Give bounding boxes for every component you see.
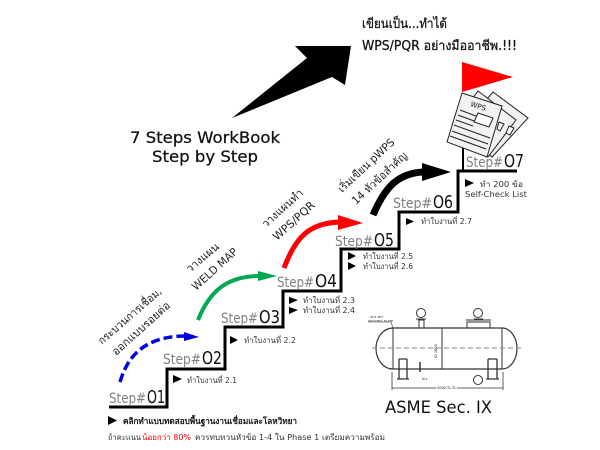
heading: goal: เขียนเป็น...ทำได้ — [362, 14, 447, 32]
step labels: Step# — [277, 275, 314, 291]
arrow: large black growth arrow — [232, 46, 351, 118]
title — [130, 128, 281, 166]
step labels: O6 — [433, 192, 453, 213]
footer instruction: ถ้าคะแนน — [108, 433, 141, 442]
vessel caption: ASME Sec. IX — [385, 398, 492, 417]
rotated captions: 14 หัวข้อสำคัญ — [349, 149, 410, 207]
step labels: O2 — [202, 348, 222, 369]
icon: red flag — [462, 62, 513, 92]
title: 7 Steps WorkBook — [130, 128, 281, 147]
step labels: Step# — [109, 391, 146, 407]
pressure vessel drawing: ID 1800 — [434, 344, 438, 358]
worksheet notes — [173, 179, 527, 385]
worksheet notes: ทำใบงานที่ 2.6 — [363, 260, 413, 271]
icon: WPS documents — [447, 91, 528, 157]
heading: goal: WPS/PQR อย่างมืออาชีพ.!!! — [362, 38, 517, 54]
heading: goal — [362, 14, 517, 54]
rotated captions: วางแผนทำ — [259, 186, 306, 230]
title: Step by Step — [152, 147, 258, 166]
worksheet notes: ทำ 200 ข้อ — [480, 180, 523, 189]
step labels: Step# — [466, 155, 503, 171]
footer instruction: น้อยกว่า 80% — [142, 433, 191, 442]
rotated captions: WPS/PQR — [270, 199, 318, 243]
worksheet notes: ทำใบงานที่ 2.4 — [303, 304, 355, 315]
step labels: Step# — [393, 196, 432, 212]
pressure vessel drawing: N.L — [422, 377, 428, 381]
footer instruction: ควรทบทวนหัวข้อ 1-4 ใน Phase 1 เตรียมความพร้อม — [195, 433, 385, 442]
step labels: O1 — [147, 387, 165, 408]
worksheet notes: ทำใบงานที่ 2.1 — [187, 374, 237, 385]
pressure vessel drawing: ON SHELL PLATE — [368, 319, 393, 323]
worksheet notes: ทำใบงานที่ 2.7 — [421, 215, 472, 226]
footer instruction: คลิกทำแบบทดสอบพื้นฐานงานเชื่อมและโลหวิทยา — [123, 414, 297, 427]
step labels: Step# — [163, 352, 201, 368]
worksheet notes: ทำใบงานที่ 2.2 — [244, 334, 296, 345]
rotated captions: กระบวนการเชื่อม, — [94, 283, 164, 347]
step labels: Step# — [221, 311, 258, 327]
step labels: O5 — [374, 230, 394, 251]
arrow: red — [284, 215, 363, 268]
rotated captions: ออกแบบรอยต่อ — [109, 299, 173, 358]
step labels: Step# — [335, 234, 373, 250]
icon: WPS documents: WPS — [469, 100, 487, 113]
worksheet notes: Self-Check List — [465, 190, 527, 199]
worksheet notes: ทำใบงานที่ 2.3 — [303, 294, 355, 305]
pressure vessel drawing: 2000 TL-TL — [437, 386, 456, 390]
step labels: O4 — [315, 271, 337, 292]
arrow: black — [373, 163, 451, 215]
arrow: green — [198, 271, 277, 320]
worksheet notes: ทำใบงานที่ 2.5 — [363, 250, 413, 261]
step labels — [109, 151, 524, 408]
rotated captions: วางแผน — [184, 240, 222, 275]
flag pole — [462, 147, 464, 171]
rotated captions: เริ่มเขียน pWPS — [334, 134, 397, 195]
footer instruction — [108, 414, 385, 442]
step labels: O3 — [259, 307, 280, 328]
rotated captions — [94, 134, 410, 358]
pressure vessel drawing: ST-5 SET — [370, 315, 383, 319]
arrow: blue dashed — [120, 332, 199, 382]
pressure vessel drawing — [368, 308, 522, 390]
step labels: O7 — [504, 151, 524, 172]
staircase — [109, 171, 517, 407]
rotated captions: WELD MAP — [189, 245, 241, 293]
